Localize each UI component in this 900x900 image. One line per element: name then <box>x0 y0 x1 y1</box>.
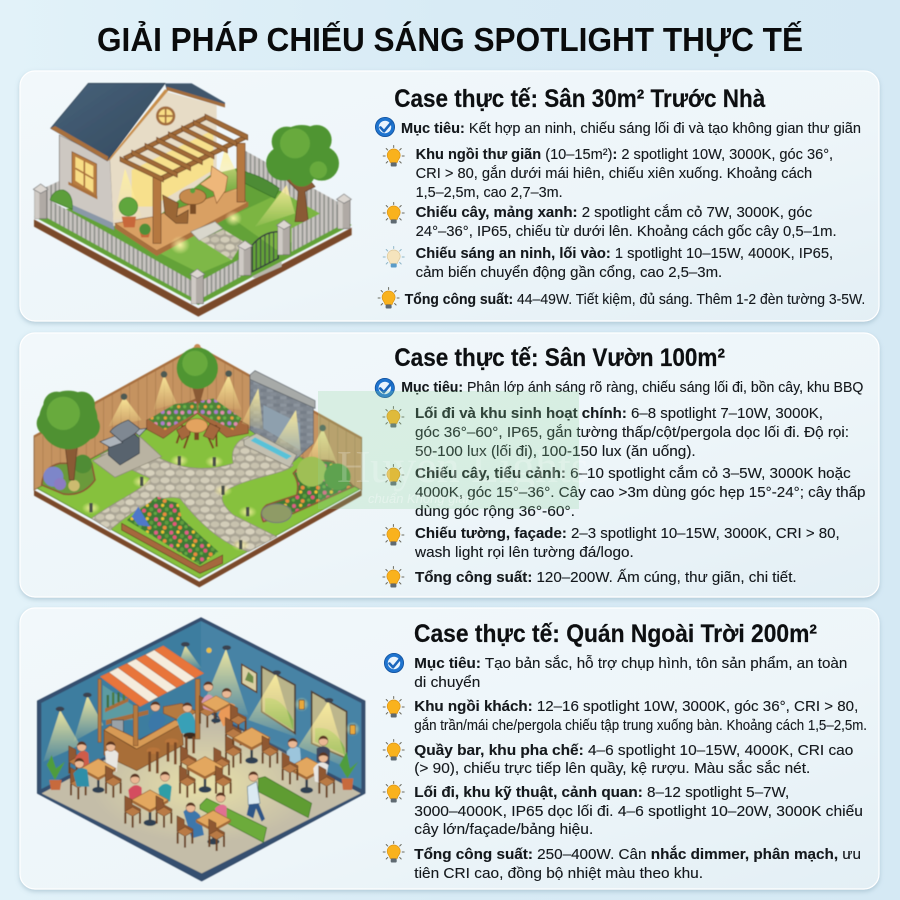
center table <box>179 746 231 798</box>
pergola beams <box>120 114 248 182</box>
left table with guests <box>69 741 121 799</box>
picture <box>242 664 257 692</box>
text: seating area <box>416 146 833 201</box>
table with chairs center right <box>225 717 278 768</box>
text: paths and landscape <box>414 784 863 838</box>
right table <box>282 736 335 798</box>
right garden bed <box>261 457 353 523</box>
watermark: chuẩn Không gian <box>368 491 473 506</box>
text: trees: Chiếu cây, mảng xanh: 2 spotlight cắm cỏ 7W, 3000K, góc <box>416 204 813 221</box>
text: goal: Mục tiêu: Tạo bản sắc, hỗ trợ chụp hình, tôn sản phẩm, an toàn <box>414 655 847 672</box>
text: paths and landscape: 3000–4000K, IP65 dọc lối đi. 4–6 spotlight 10–20W, 3000K chiếu <box>414 803 863 820</box>
lanterns <box>206 648 360 736</box>
bollard lights <box>82 455 257 551</box>
tree <box>266 125 339 222</box>
ground block <box>34 402 362 587</box>
panel background 3 <box>20 608 879 889</box>
path and steps <box>191 222 243 260</box>
deck edge <box>115 202 248 256</box>
house side wall <box>59 135 114 230</box>
text: total power: Tổng công suất: 44–49W. Tiết kiệm, đủ sáng. Thêm 1-2 đèn tường 3-5W. <box>405 291 865 308</box>
icon: check goal <box>375 117 395 137</box>
potted plant <box>119 197 151 237</box>
foundation <box>73 205 114 230</box>
BBQ grill <box>100 420 147 465</box>
text: trees: 24°–36°, IP65, chiếu từ dưới lên. Khoảng cách gốc cây 0,5–1m. <box>416 223 837 240</box>
text: seating area: CRI > 80, gắn dưới mái hiên, chiếu xiên xuống. Khoảng cách <box>416 165 812 182</box>
icon: bulb <box>383 782 404 802</box>
water basin <box>244 433 297 467</box>
panel background 1 <box>20 71 879 321</box>
text: facade: wash light rọi lên tường đá/logo. <box>414 544 634 561</box>
icon: bulb <box>383 696 404 718</box>
heading: case 1: Case thực tế: Sân 30m² Trước Nhà <box>394 85 765 113</box>
hedge front <box>200 798 267 842</box>
text: paths: góc 36°–60°, IP65, gắn tường thấp/cột/pergola dọc lối đi. Độ rọi: <box>415 424 849 441</box>
text: total power <box>414 845 861 882</box>
icon: bulb <box>383 146 404 166</box>
text: guest seating <box>414 698 867 734</box>
windows <box>262 667 347 758</box>
text: paths and landscape: Lối đi, khu kỹ thuật, cảnh quan: 8–12 spotlight 5–7W, <box>414 784 789 801</box>
icon: bulb <box>378 288 399 308</box>
text: bar: (> 90), chiếu trực tiếp lên quầy, kệ rượu. Màu sắc sắc nét. <box>414 760 810 777</box>
text: guest seating: Khu ngồi khách: 12–16 spotlight 10W, 3000K, góc 36°, CRI > 80, <box>414 698 858 715</box>
text: plants <box>415 465 866 520</box>
watermark <box>318 391 589 509</box>
text: security: Chiếu sáng an ninh, lối vào: 1 spotlight 10–15W, 4000K, IP65, <box>416 245 833 262</box>
illustration: outdoor cafe <box>37 618 365 881</box>
water wall <box>242 371 315 462</box>
icon: bulb <box>383 740 404 760</box>
left small fence <box>43 181 60 208</box>
icon: bulb <box>383 406 404 428</box>
text: plants: Chiếu cây, tiểu cảnh: 6–10 spotlight cắm cỏ 3–5W, 3000K hoặc <box>415 465 851 482</box>
right fence <box>292 204 338 252</box>
room shell <box>37 618 365 881</box>
icon: bulb <box>383 842 404 862</box>
text: goal: Mục tiêu: Phân lớp ánh sáng rõ ràng, chiếu sáng lối đi, bồn cây, khu BBQ <box>401 379 863 396</box>
text: bar: Quầy bar, khu pha chế: 4–6 spotlight 10–15W, 4000K, CRI cao <box>414 742 853 759</box>
lit windows <box>132 130 213 207</box>
stone path <box>92 436 293 552</box>
front left table <box>125 771 172 828</box>
front table with guests <box>177 792 231 851</box>
back fence <box>245 151 337 223</box>
hedge <box>245 172 279 198</box>
watermark: Huyền Lights <box>337 441 589 492</box>
icon: bulb <box>383 464 404 486</box>
title: GIẢI PHÁP CHIẾU SÁNG SPOTLIGHT THỰC TẾ <box>97 21 803 58</box>
panel background 2 <box>20 333 879 597</box>
barista <box>148 701 166 732</box>
potted plants <box>47 752 358 790</box>
text: seating area: 1,5–2,5m, cao 2,7–3m. <box>416 184 563 201</box>
text: facade <box>414 525 840 561</box>
text: facade: Chiếu tường, façade: 2–3 spotlight 10–15W, 3000K, CRI > 80, <box>415 525 840 542</box>
icon: bulb <box>383 566 404 588</box>
fence posts <box>33 184 351 304</box>
back walls <box>34 344 362 490</box>
icon: pale bulb <box>383 246 404 268</box>
panel: Sân 30m² trước nhà <box>20 71 879 321</box>
text: bar <box>414 742 853 777</box>
back planters <box>147 398 248 438</box>
left tree <box>37 391 100 449</box>
text: seating area: Khu ngồi thư giãn (10–15m²): 2 spotlight 10W, 3000K, góc 36°, <box>416 146 833 163</box>
side window <box>68 152 97 199</box>
deck <box>115 188 247 251</box>
text: paths: Lối đi và khu sinh hoạt chính: 6–8 spotlight 7–10W, 3000K, <box>415 405 823 422</box>
panel: Sân vườn 100m² <box>20 333 879 597</box>
bar stools <box>147 732 197 773</box>
ground block <box>34 166 352 317</box>
striped awning <box>100 646 204 707</box>
icon: check goal <box>375 378 394 398</box>
text: total power: Tổng công suất: 250–400W. Cân nhắc dimmer, phân mạch, ưu <box>414 845 861 863</box>
text: paths <box>415 405 849 460</box>
bar shelves <box>103 685 148 733</box>
text: goal: di chuyển <box>414 674 480 691</box>
illustration: garden <box>34 344 362 587</box>
illustration: house with pergola and garden <box>33 83 352 317</box>
text: goal: Mục tiêu: Kết hợp an ninh, chiếu sáng lối đi và tạo không gian thư giãn <box>401 120 861 137</box>
gable wall <box>110 92 217 226</box>
BBQ slab <box>93 437 162 477</box>
heading: case 3: Case thực tế: Quán Ngoài Trời 200m² <box>414 620 817 648</box>
light cones <box>113 148 295 254</box>
bar customer <box>177 702 196 733</box>
text: plants: 4000K, góc 15°–36°. Cây cao >3m dùng góc hẹp 15°-24°; cây thấp <box>415 484 866 501</box>
floor <box>42 709 361 873</box>
pergola posts <box>153 143 245 243</box>
text: trees <box>416 204 837 240</box>
left bush <box>50 190 72 209</box>
floor glow <box>90 727 317 843</box>
back tree <box>177 348 218 403</box>
front fence <box>45 197 192 297</box>
panel: Quán ngoài trời 200m² <box>20 608 879 889</box>
gate <box>252 232 282 278</box>
text: total power: tiên CRI cao, đồng bộ nhiệt màu theo khu. <box>414 865 703 882</box>
deck furniture <box>163 166 228 223</box>
roof <box>51 83 225 161</box>
wall lights <box>108 370 340 470</box>
icon: bulb <box>383 524 404 546</box>
round window <box>156 106 175 126</box>
patio table set <box>177 419 220 448</box>
text: total power: Tổng công suất: 120–200W. Ấm cúng, thư giãn, chi tiết. <box>415 569 797 586</box>
hedge right <box>258 777 312 818</box>
text: goal <box>414 655 847 691</box>
back table <box>199 681 246 736</box>
heading: case 2: Case thực tế: Sân Vườn 100m² <box>394 344 725 372</box>
text: security <box>416 245 833 281</box>
front planter <box>122 497 223 573</box>
awning posts <box>98 679 200 746</box>
text: paths: 50-100 lux (lối đi), 100-150 lux (ăn uống). <box>415 443 696 460</box>
fence right of corner <box>203 259 241 297</box>
text: plants: dùng góc rộng 36°-60°. <box>415 503 575 520</box>
waiter <box>247 771 265 822</box>
bar counter <box>104 703 197 771</box>
icon: bulb <box>383 202 404 224</box>
text: security: cảm biến chuyển động gần cổng, cao 2,5–3m. <box>416 264 722 281</box>
text: paths and landscape: cây lớn/façade/bảng hiệu. <box>414 821 593 838</box>
icon: check goal <box>384 653 404 673</box>
left tree bed <box>42 445 95 494</box>
wall light beams <box>43 642 348 768</box>
